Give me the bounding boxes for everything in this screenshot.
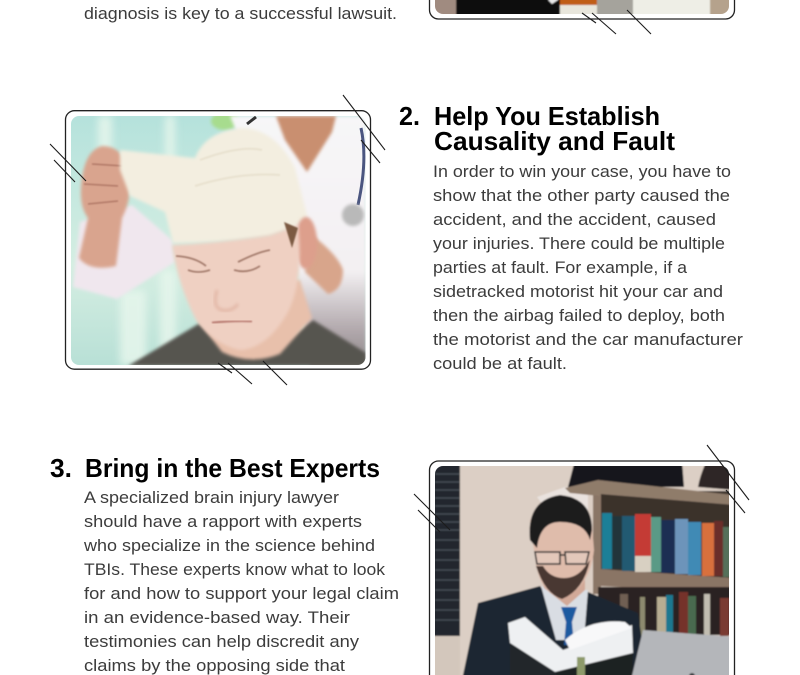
patient's neck	[199, 280, 312, 360]
photo: section 1 lawyer and client	[435, 0, 729, 14]
decorative accent lines: section 3 photo	[414, 445, 749, 532]
text block: section 2 body: your injuries. There could be multiple	[433, 234, 725, 253]
text block: section 2 body: show that the other party caused the	[433, 186, 730, 205]
heading: section 2: Help You Establish	[434, 101, 660, 131]
decorative accent lines: section 1 photo	[582, 10, 651, 34]
poster behind shelf	[538, 487, 588, 510]
text block: section 2 body: could be at fault.	[433, 354, 567, 373]
text block: section 3 body	[83, 488, 399, 675]
text block: section 2 body: sidetracked motorist hit your car and	[433, 282, 723, 301]
text block: section 3 body: testimonies can help discredit any	[84, 632, 360, 651]
heading: section 3: 3.	[50, 453, 72, 483]
glasses	[535, 552, 589, 564]
head	[533, 521, 595, 591]
text block: section 3 body: claims by the opposing side that	[84, 656, 345, 675]
neck	[543, 580, 586, 606]
heading: section 2: Causality and Fault	[434, 126, 675, 156]
decorative accent lines: section 2 photo	[50, 95, 385, 385]
text block: section 2 body: parties at fault. For example, if a	[433, 258, 688, 277]
patient's shirt	[128, 320, 366, 366]
ear	[295, 217, 317, 269]
window blinds	[435, 466, 461, 675]
heading: section 2	[399, 101, 675, 156]
text block: section 2 body: then the airbag failed to deploy, both	[433, 306, 725, 325]
photo: lawyer reading a book by a bookshelf	[430, 460, 735, 675]
text block: section 3 body: who specialize in the science behind	[83, 536, 375, 555]
photo: doctor bandaging patient's head	[71, 112, 366, 366]
text block: section 2 body: the motorist and the car manufacturer	[433, 330, 743, 349]
text block: section 3 body: should have a rapport with experts	[84, 512, 362, 531]
open book	[508, 617, 633, 672]
lower row of books	[620, 592, 729, 637]
stethoscope	[358, 128, 364, 205]
forearm and hand	[79, 146, 130, 268]
text block: section 2 body	[433, 162, 743, 373]
text block: section 3 body: TBIs. These experts know what to look	[84, 560, 386, 579]
text block: section 3 body: A specialized brain injury lawyer	[84, 488, 339, 507]
patient's face	[172, 225, 300, 350]
shirt collar and tie	[541, 586, 588, 640]
heading: section 3: Bring in the Best Experts	[85, 453, 380, 483]
doctor's arm, right	[305, 235, 343, 294]
doctor's coat	[230, 116, 366, 366]
photo frame: section 3	[430, 460, 735, 675]
suit	[462, 586, 648, 675]
bandage	[120, 128, 307, 243]
text block: section 3 body: for and how to support your legal claim	[84, 584, 399, 603]
sleeve	[73, 205, 175, 299]
heading: section 2: 2.	[399, 101, 420, 131]
eyes, nose, mouth	[176, 250, 270, 272]
photo frame: section 1 (cropped at top)	[430, 0, 734, 20]
section 1 closing text: diagnosis is key to a successful lawsuit.	[84, 4, 397, 23]
trophy and urn on the shelf	[567, 466, 685, 488]
text block: section 2 body: accident, and the accident, caused	[433, 210, 716, 229]
laptop	[631, 630, 734, 675]
beard	[536, 560, 590, 599]
bookshelf	[565, 480, 734, 637]
photo frame: section 2	[66, 111, 370, 369]
text block: section 3 body: in an evidence-based way. Their	[84, 608, 350, 627]
hair	[530, 495, 592, 548]
upper row of books	[602, 513, 731, 577]
text block: section 2 body: In order to win your case, you have to	[433, 162, 731, 181]
